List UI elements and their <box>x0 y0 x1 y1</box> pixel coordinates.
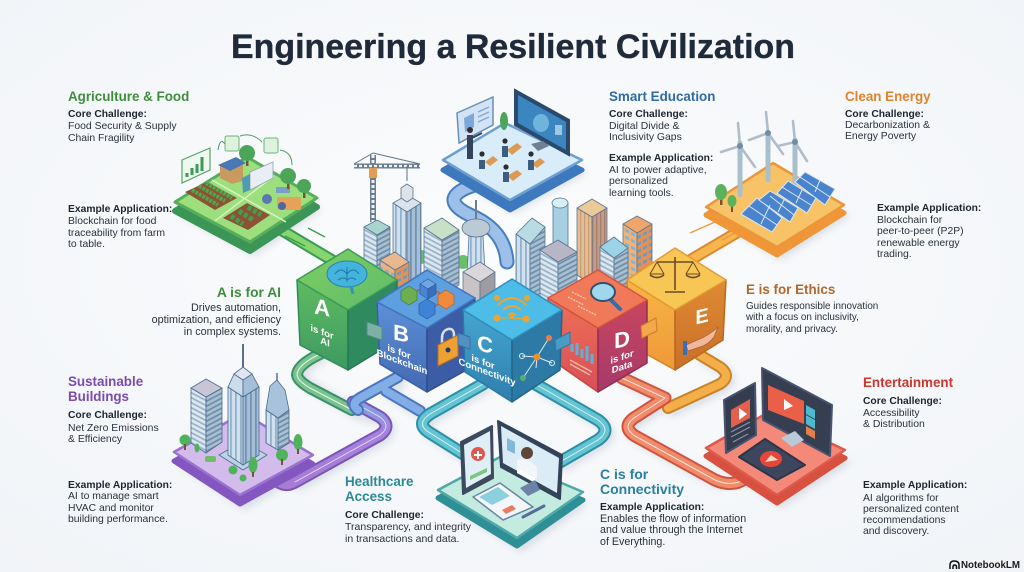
shed and truck <box>218 157 273 193</box>
pipe: orange from ethics <box>668 355 726 408</box>
whiteboard <box>457 97 493 143</box>
platform: healthcare <box>438 421 583 546</box>
label: C is for Connectivity: Connectivity <box>459 356 516 389</box>
text: smart education: AI to power adaptive, <box>609 165 707 176</box>
text: E is for Ethics: morality, and privacy. <box>746 324 838 335</box>
central skyscraper <box>219 344 267 470</box>
label: C is for Connectivity: is for <box>471 353 495 372</box>
text: C is for connectivity: and value through the Internet <box>600 524 743 536</box>
pipe: teal loops <box>422 384 605 462</box>
label: A is for AI: is for <box>310 323 334 342</box>
icon: hand <box>683 327 718 355</box>
icon: wifi nodes <box>494 295 530 322</box>
text: smart education: Smart Education <box>609 89 715 104</box>
text: C is for connectivity: of Everything. <box>600 536 665 548</box>
glass tower <box>516 218 545 300</box>
text: sustainable buildings: & Efficiency <box>68 434 123 445</box>
tall building with block on top <box>393 184 421 300</box>
text: agriculture and food <box>68 89 189 250</box>
text: entertainment: Core Challenge: <box>863 396 942 407</box>
icons floating <box>218 135 292 165</box>
label: D is for Data: is for <box>610 348 634 367</box>
text: E is for Ethics: Guides responsible innovation <box>746 301 878 312</box>
label: C is for Connectivity: C <box>477 330 493 359</box>
label: D is for Data: D <box>614 326 630 354</box>
building 3 <box>424 218 459 295</box>
text: smart education <box>609 89 715 199</box>
large screen <box>515 90 569 155</box>
text: smart education: personalized <box>609 176 668 187</box>
text: healthcare access: Healthcare <box>345 474 413 489</box>
small blue building <box>600 237 628 295</box>
label: B is for Blockchain: Blockchain <box>377 348 427 378</box>
orange tall <box>623 216 652 285</box>
cube A <box>297 249 397 370</box>
text: smart education: Digital Divide & <box>609 121 680 132</box>
text: entertainment <box>863 375 967 537</box>
flow arrows <box>285 222 742 246</box>
connector tabs <box>367 318 657 351</box>
logo: NotebookLM: NotebookLM <box>961 560 1020 571</box>
text: E is for Ethics: E is for Ethics <box>746 282 835 297</box>
text: A is for AI <box>152 285 282 338</box>
text: C is for connectivity: Connectivity <box>600 481 684 497</box>
text: clean energy: Blockchain for <box>877 215 943 226</box>
icon: padlock <box>438 329 458 366</box>
brown tall <box>577 199 607 285</box>
text: agriculture and food: Blockchain for food <box>68 216 157 227</box>
label: B is for Blockchain: is for <box>387 343 411 362</box>
cube D <box>548 270 647 392</box>
text: healthcare access: Core Challenge: <box>345 510 424 521</box>
text: C is for connectivity <box>600 466 746 548</box>
icon: network <box>520 335 554 381</box>
cube B <box>377 270 475 392</box>
text: healthcare access: Transparency, and integrity <box>345 521 472 533</box>
text: clean energy: Decarbonization & <box>845 120 930 131</box>
media pad <box>739 439 805 480</box>
icon: magnifier <box>568 283 620 315</box>
trees <box>715 184 736 212</box>
text: sustainable buildings: Net Zero Emissions <box>68 423 159 434</box>
teacher and class <box>467 112 545 182</box>
text: clean energy: Clean Energy <box>845 89 931 104</box>
text: entertainment: AI algorithms for <box>863 493 939 504</box>
text: smart education: Inclusivity Gaps <box>609 132 682 143</box>
platform: agriculture <box>175 135 317 251</box>
text: A is for AI: Drives automation, <box>191 302 281 314</box>
label: A is for AI: AI <box>320 335 330 350</box>
chart board <box>182 148 210 183</box>
orange small building <box>380 252 409 305</box>
text: entertainment: & Distribution <box>863 419 925 430</box>
text: clean energy <box>845 89 981 260</box>
text: A is for AI: in complex systems. <box>184 326 281 338</box>
text: smart education: Example Application: <box>609 153 713 164</box>
text: C is for connectivity: Enables the flow of information <box>600 513 746 525</box>
text: smart education: Core Challenge: <box>609 109 688 120</box>
machine <box>262 187 301 210</box>
label: D is for Data: Data <box>612 359 633 376</box>
text: entertainment: recommendations <box>863 515 946 526</box>
pipe: purple to buildings <box>276 402 386 485</box>
text: entertainment: Example Application: <box>863 480 967 491</box>
right tower <box>266 373 289 450</box>
text: sustainable buildings: building performance. <box>68 514 168 525</box>
platform: education <box>443 90 582 210</box>
cube C <box>459 279 562 402</box>
text: entertainment: personalized content <box>863 504 959 515</box>
label: C is for Connectivity <box>459 330 516 389</box>
text: healthcare access <box>345 474 472 545</box>
observation tower <box>462 200 490 290</box>
text: sustainable buildings: Example Application: <box>68 480 172 491</box>
text: sustainable buildings <box>68 374 172 525</box>
pipe: agriculture link <box>278 228 335 262</box>
platform: entertainment <box>706 368 845 503</box>
text: clean energy: trading. <box>877 249 912 260</box>
icon: brain <box>327 261 367 294</box>
text: entertainment: and discovery. <box>863 526 929 537</box>
platform: sustainable buildings <box>174 344 313 504</box>
pipe: energy link <box>692 229 743 259</box>
text: sustainable buildings: AI to manage smart <box>68 491 159 502</box>
trees behind <box>414 250 470 269</box>
text: healthcare access: Access <box>345 489 392 504</box>
text: entertainment: Accessibility <box>863 408 920 419</box>
text: entertainment: Entertainment <box>863 375 954 390</box>
icon: data chart <box>570 343 592 375</box>
text: E is for Ethics <box>745 282 878 335</box>
text: A is for AI: optimization, and efficiency <box>152 314 282 326</box>
pipe: blue from blockchain <box>354 377 420 411</box>
text: sustainable buildings: Buildings <box>68 389 129 404</box>
tablet <box>461 426 493 494</box>
text: clean energy: Core Challenge: <box>845 109 924 120</box>
label: A is for AI <box>310 293 334 350</box>
grey small building <box>463 262 495 305</box>
text: smart education: learning tools. <box>609 188 674 199</box>
label: A is for AI: A <box>314 293 330 322</box>
text: clean energy: Energy Poverty <box>845 131 917 142</box>
grey building <box>540 240 577 310</box>
text: sustainable buildings: HVAC and monitor <box>68 503 154 514</box>
platform: clean energy <box>706 112 844 255</box>
icon: scales <box>650 257 700 292</box>
pipe: education link <box>454 184 507 262</box>
cube E <box>627 248 726 370</box>
text: clean energy: renewable energy <box>877 238 960 249</box>
icon: block chain <box>401 279 454 319</box>
building 1 <box>364 220 390 285</box>
monitor <box>762 368 832 456</box>
record tablet and pen <box>473 483 544 520</box>
text: A is for AI: A is for AI <box>217 285 281 300</box>
text: sustainable buildings: Sustainable <box>68 374 143 389</box>
text: agriculture and food: Food Security & Supply <box>68 121 177 132</box>
left tower <box>191 379 222 453</box>
wind turbines <box>721 112 807 195</box>
soft shadows <box>178 136 852 552</box>
text: clean energy: Example Application: <box>877 203 981 214</box>
fields <box>185 182 270 230</box>
text: agriculture and food: Agriculture & Food <box>68 89 189 104</box>
text: agriculture and food: Chain Fragility <box>68 133 135 144</box>
label: D is for Data <box>610 326 634 376</box>
letter E: E <box>695 305 709 330</box>
pipe network <box>276 184 746 485</box>
text: agriculture and food: traceability from farm <box>68 228 165 239</box>
text: E is for Ethics: with a focus on inclusivity, <box>745 312 859 323</box>
glass cylinder <box>552 198 568 258</box>
trees <box>180 434 302 482</box>
label: B is for Blockchain <box>377 319 427 378</box>
text: C is for connectivity: Example Application: <box>600 502 704 513</box>
solar panels <box>741 172 835 232</box>
phone <box>724 383 756 453</box>
title: Engineering a Resilient Civilization <box>231 28 795 66</box>
trees <box>239 145 311 198</box>
crane <box>354 153 420 222</box>
label: B is for Blockchain: B <box>393 319 409 348</box>
text: clean energy: peer-to-peer (P2P) <box>877 226 964 237</box>
city skyline <box>354 153 652 310</box>
text: C is for connectivity: C is for <box>600 466 649 482</box>
text: agriculture and food: Example Application: <box>68 204 172 215</box>
text: agriculture and food: to table. <box>68 239 105 250</box>
text: sustainable buildings: Core Challenge: <box>68 410 147 421</box>
text: healthcare access: in transactions and data. <box>345 533 459 545</box>
pipe: green lower <box>297 354 352 410</box>
pipe: red to entertainment <box>622 378 746 484</box>
telemedicine monitor <box>498 421 562 499</box>
text: agriculture and food: Core Challenge: <box>68 109 147 120</box>
